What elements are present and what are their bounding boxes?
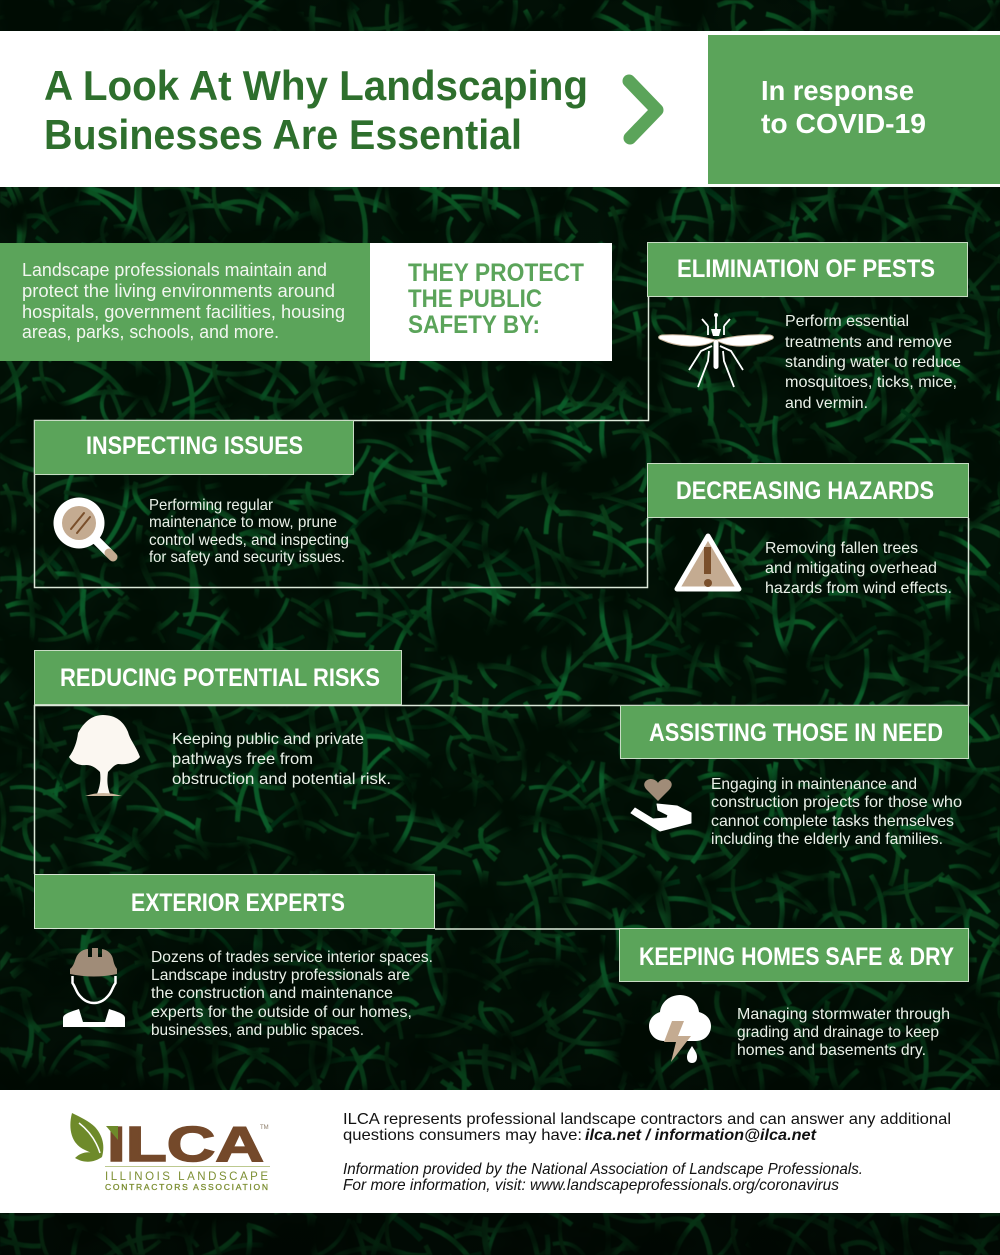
description: experts for the outside of our homes, xyxy=(151,1004,412,1021)
source note: For more information, visit: www.landscapeprofessionals.org/coronavirus xyxy=(343,1177,839,1194)
contact text: questions consumers may have: xyxy=(343,1127,582,1144)
intro text xyxy=(22,260,345,342)
description: Engaging in maintenance and xyxy=(711,776,917,793)
icon: chevron arrow xyxy=(629,81,657,138)
description: the construction and maintenance xyxy=(151,985,393,1002)
subtitle panel: to COVID-19 xyxy=(761,108,926,139)
description: cannot complete tasks themselves xyxy=(711,813,954,830)
description: businesses, and public spaces. xyxy=(151,1022,364,1039)
panel: intro xyxy=(0,243,612,361)
description xyxy=(172,731,391,788)
description: Dozens of trades service interior spaces. xyxy=(151,949,433,966)
description: Keeping public and private xyxy=(172,731,364,748)
contact text: ILCA represents professional landscape contractors and can answer any additional xyxy=(343,1111,951,1128)
title: A Look At Why Landscaping xyxy=(44,62,588,109)
icon: warning triangle xyxy=(677,536,739,589)
panel: inspecting issues: INSPECTING ISSUES xyxy=(86,432,303,460)
description: obstruction and potential risk. xyxy=(172,771,391,788)
panel: assisting those in need: ASSISTING THOSE IN NEED xyxy=(649,719,943,747)
panel: exterior experts xyxy=(34,874,434,1039)
description: Landscape industry professionals are xyxy=(151,967,410,984)
icon: storm cloud xyxy=(649,995,711,1063)
title xyxy=(44,62,588,158)
logo: ILCA: TM xyxy=(260,1125,269,1131)
intro text: protect the living environments around xyxy=(22,281,335,301)
intro text: hospitals, government facilities, housing xyxy=(22,302,345,322)
title: Businesses Are Essential xyxy=(44,111,522,158)
description: maintenance to mow, prune xyxy=(149,514,337,531)
heading: they protect: SAFETY BY: xyxy=(408,311,540,339)
contact text xyxy=(343,1111,951,1144)
logo: ILCA: CONTRACTORS ASSOCIATION xyxy=(105,1182,268,1192)
connector frame lines xyxy=(34,297,968,929)
intro text: areas, parks, schools, and more. xyxy=(22,322,279,342)
description: control weeds, and inspecting xyxy=(149,532,349,549)
description: standing water to reduce xyxy=(785,354,961,371)
panel: reducing potential risks xyxy=(34,650,402,796)
panel: decreasing hazards: DECREASING HAZARDS xyxy=(676,477,934,505)
icon: magnifying glass xyxy=(54,498,113,557)
panel: keeping homes safe and dry: KEEPING HOMES SAFE & DRY xyxy=(639,943,954,971)
description xyxy=(737,1006,950,1059)
logo: ILCA: ILCA xyxy=(107,1118,264,1172)
description xyxy=(151,949,433,1039)
description: homes and basements dry. xyxy=(737,1042,926,1059)
description: Perform essential xyxy=(785,313,909,330)
heading: they protect: THEY PROTECT xyxy=(408,259,584,287)
description: for safety and security issues. xyxy=(149,549,345,566)
description: pathways free from xyxy=(172,751,313,768)
header band xyxy=(0,31,1000,187)
subtitle panel: In response xyxy=(761,75,914,106)
panel: reducing potential risks: REDUCING POTENTIAL RISKS xyxy=(60,664,380,692)
footer band xyxy=(0,1090,1000,1213)
description: and mitigating overhead xyxy=(765,560,937,577)
description xyxy=(765,540,952,597)
panel: assisting those in need xyxy=(620,706,968,848)
source note xyxy=(343,1161,863,1194)
icon: worker with hard hat xyxy=(63,948,125,1027)
source note: Information provided by the National Association of Landscape Professionals. xyxy=(343,1161,863,1178)
description: grading and drainage to keep xyxy=(737,1024,939,1041)
description: Performing regular xyxy=(149,497,274,514)
description: mosquitoes, ticks, mice, xyxy=(785,374,957,391)
subtitle panel xyxy=(708,35,1000,184)
contact text: ilca.net / information@ilca.net xyxy=(585,1127,817,1144)
description: and vermin. xyxy=(785,395,868,412)
panel: inspecting issues xyxy=(34,420,354,566)
description: Removing fallen trees xyxy=(765,540,918,557)
description: construction projects for those who xyxy=(711,794,962,811)
description: treatments and remove xyxy=(785,334,952,351)
heading: they protect xyxy=(408,259,584,339)
description xyxy=(149,497,349,566)
panel: exterior experts: EXTERIOR EXPERTS xyxy=(131,889,345,917)
intro text: Landscape professionals maintain and xyxy=(22,260,327,280)
description: Managing stormwater through xyxy=(737,1006,950,1023)
description xyxy=(711,776,962,848)
heading: they protect: THE PUBLIC xyxy=(408,285,542,313)
logo: ILCA: ILLINOIS LANDSCAPE xyxy=(105,1171,268,1183)
icon: mosquito xyxy=(659,313,773,387)
panel: elimination of pests xyxy=(648,242,968,412)
description: including the elderly and families. xyxy=(711,831,943,848)
description: hazards from wind effects. xyxy=(765,580,952,597)
logo: ILCA xyxy=(70,1113,270,1192)
icon: tree xyxy=(69,715,140,796)
panel: keeping homes safe and dry xyxy=(620,928,968,1063)
panel: decreasing hazards xyxy=(648,464,968,597)
icon: hand with heart xyxy=(631,779,691,831)
panel: elimination of pests: ELIMINATION OF PESTS xyxy=(677,255,935,283)
description xyxy=(785,313,961,412)
